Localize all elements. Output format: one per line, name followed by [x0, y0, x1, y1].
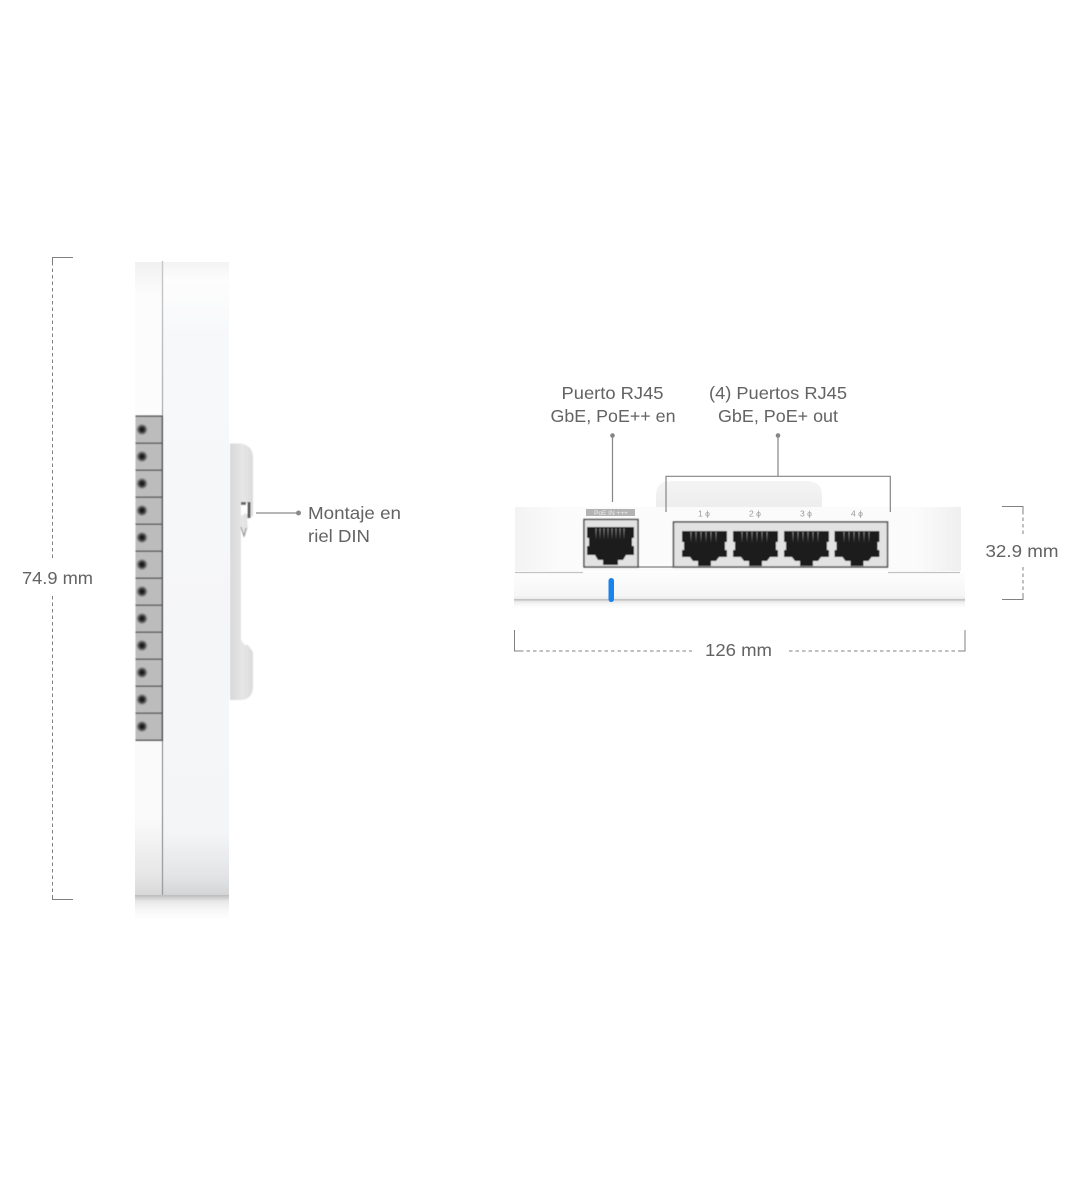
- terminal strip: [136, 416, 163, 741]
- callout: DIN rail mount: [256, 503, 401, 546]
- mounting bracket: [230, 444, 253, 700]
- side view device: [135, 261, 253, 920]
- port label: PoE IN: PoE IN +++: [594, 511, 629, 517]
- port numbers: 1 ϕ: [698, 508, 710, 518]
- label: Montaje en riel DIN: Montaje en: [308, 503, 401, 523]
- upper face: [515, 507, 961, 571]
- label: Puerto RJ45 GbE, PoE++ en: [550, 383, 676, 426]
- port numbers: [698, 508, 863, 518]
- port numbers: 4 ϕ: [851, 508, 863, 518]
- port numbers: 2 ϕ: [749, 508, 761, 518]
- floor shadow: [135, 895, 229, 920]
- port numbers: 3 ϕ: [800, 508, 812, 518]
- port 1: [682, 531, 727, 566]
- callout: PoE+ out ports: [666, 383, 890, 512]
- lower body: [514, 572, 965, 600]
- device front body: [163, 262, 229, 895]
- top clip: [656, 481, 822, 508]
- seam lines: [515, 572, 960, 574]
- bottom edge: [514, 599, 965, 600]
- floor shadow: [514, 599, 965, 608]
- label: depth 32.9 mm: 32.9 mm: [986, 541, 1058, 561]
- label: (4) Puertos RJ45 GbE, PoE+ out: GbE, PoE+ out: [718, 406, 838, 426]
- port label: PoE IN: [586, 509, 635, 517]
- label: Puerto RJ45 GbE, PoE++ en: Puerto RJ45: [562, 383, 664, 403]
- port 3: [784, 531, 829, 566]
- callout: PoE++ in port: [550, 383, 676, 502]
- dimension bracket: depth 32.9 mm: [1002, 506, 1023, 600]
- dimension bracket: height 74.9 mm: [52, 258, 73, 900]
- PoE out port group: [674, 522, 888, 567]
- label: height 74.9 mm: 74.9 mm: [22, 568, 93, 588]
- front view device: [514, 481, 965, 608]
- port 4: [834, 531, 880, 566]
- label: (4) Puertos RJ45 GbE, PoE+ out: (4) Puertos RJ45: [709, 383, 847, 403]
- seam: [162, 261, 163, 895]
- label: Montaje en riel DIN: [308, 503, 401, 546]
- label: Puerto RJ45 GbE, PoE++ en: GbE, PoE++ en: [550, 406, 676, 426]
- label: width 126 mm: 126 mm: [705, 640, 772, 660]
- label: (4) Puertos RJ45 GbE, PoE+ out: [709, 383, 847, 426]
- PoE in port: [584, 520, 638, 567]
- dimension bracket: width 126 mm: [514, 630, 965, 651]
- LED indicator: [608, 578, 614, 602]
- device back body: [135, 262, 162, 895]
- port 2: [733, 531, 778, 566]
- label: Montaje en riel DIN: riel DIN: [308, 526, 370, 546]
